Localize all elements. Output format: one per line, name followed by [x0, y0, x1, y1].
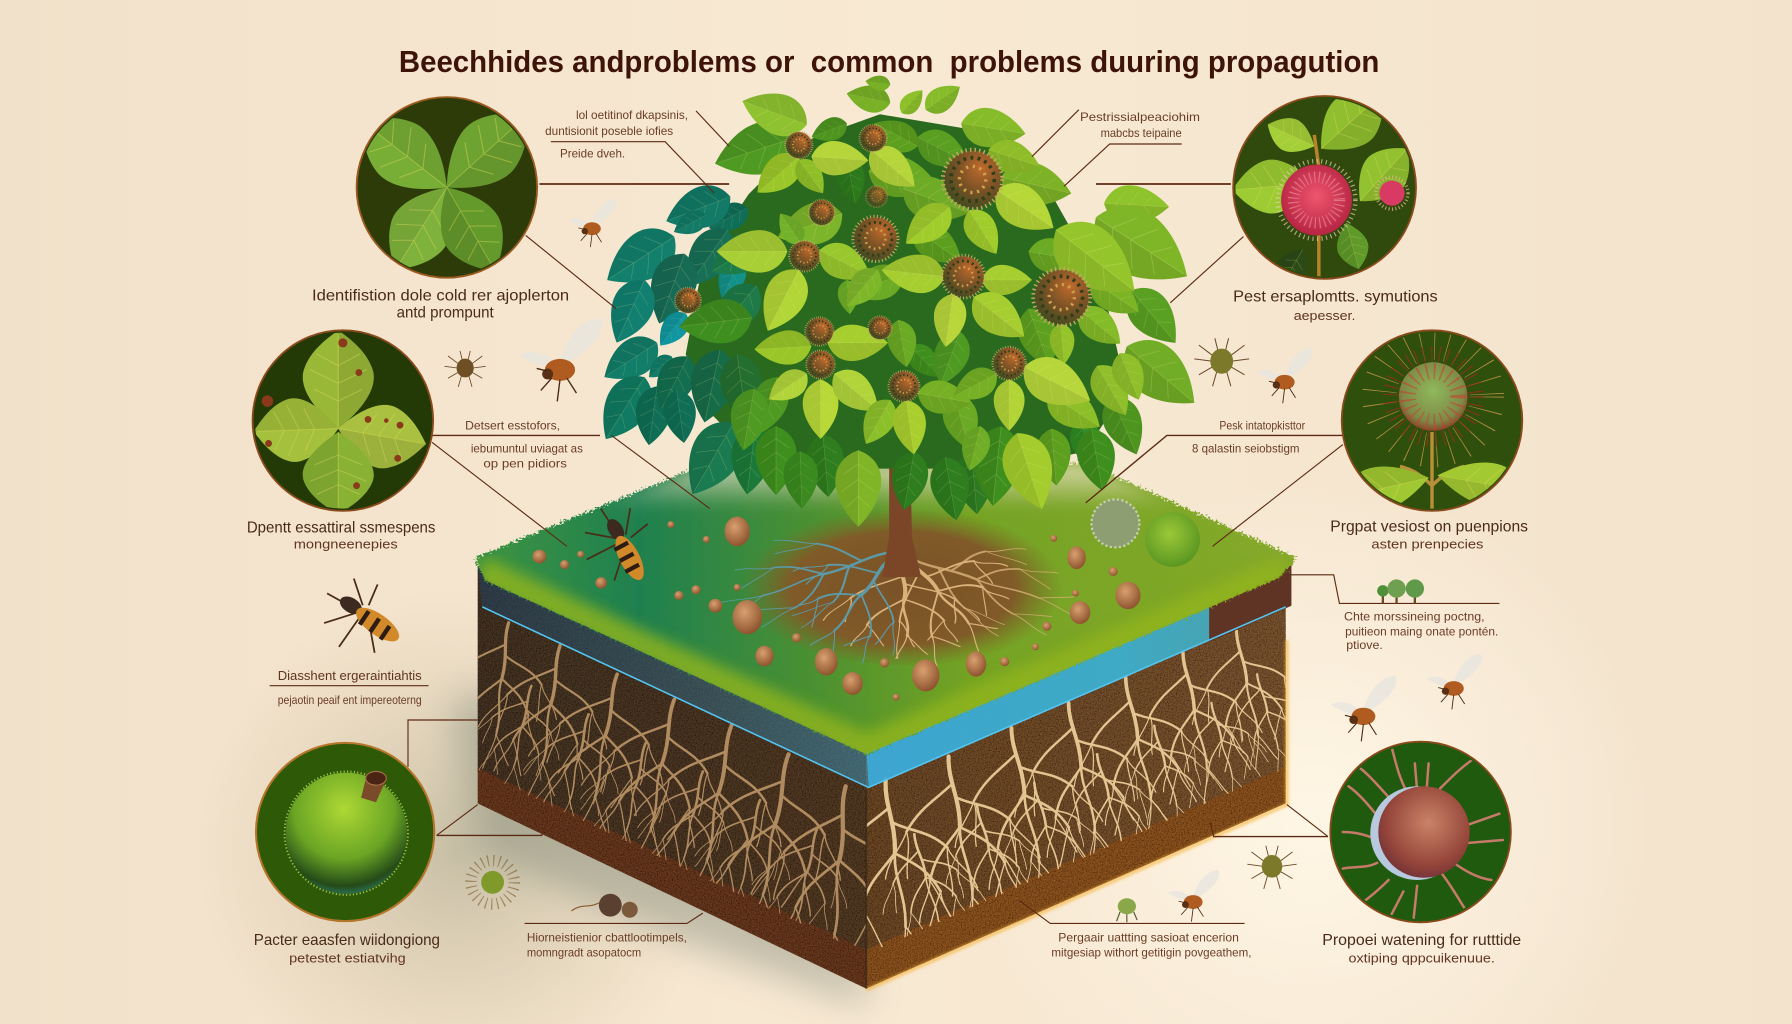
panel: red virus circle — [1330, 742, 1511, 922]
text: right lower note: ptiove. — [1346, 638, 1383, 652]
icon: brown mite — [445, 351, 486, 387]
text: spotted leaves caption: mongneenepies — [294, 537, 398, 552]
panel: green sphere circle — [256, 743, 434, 921]
text: lower right note — [1051, 931, 1251, 960]
mid green leaves — [677, 74, 1211, 524]
text: top left note: duntisionit poseble iofies — [545, 124, 673, 138]
tree trunk — [882, 440, 921, 577]
text: red virus caption — [1322, 932, 1521, 965]
text: lower left note: Hiorneistienior cbattlootimpels, — [527, 931, 687, 945]
text: red virus caption: Propoei watening for rutttide — [1322, 932, 1521, 949]
icon: fly right — [1257, 348, 1313, 403]
text: top left note: lol oetitinof dkapsinis, — [576, 108, 688, 122]
icon: fly lower right two — [1426, 654, 1482, 709]
block: right soil face — [866, 566, 1286, 954]
text: right lower note: puitieon maing onate pontén. — [1345, 624, 1498, 638]
text: green sphere caption: Pacter eaasfen wiidongiong — [254, 932, 440, 949]
panel: spiky sphere circle — [1340, 329, 1524, 512]
text: spotted leaves caption: Dpentt essattiral ssmespens — [247, 520, 435, 537]
small balls on the grass — [533, 517, 1141, 701]
icon: fly lower right one — [1331, 676, 1397, 741]
panel: red bur circle — [1232, 95, 1417, 280]
icon: soil pebbles — [571, 894, 638, 918]
icon: orange winged insect — [1167, 870, 1219, 922]
grass top — [474, 463, 1297, 754]
text: green sphere caption — [254, 932, 440, 965]
icon: green beetle — [1117, 898, 1137, 922]
text: right middle note: Pesk intatopkisttor — [1219, 419, 1305, 433]
block: left water layer — [478, 566, 869, 787]
icon: small fly — [568, 199, 616, 247]
soil block cross-section — [426, 463, 1322, 1006]
icon: large fly — [519, 319, 602, 401]
lime front leaves — [717, 137, 1153, 527]
block: left clay band — [478, 768, 866, 989]
text: top right note: Pestrissialpeaciohim — [1080, 110, 1200, 124]
text: left middle note — [465, 419, 583, 470]
text: healthy leaves caption — [312, 288, 569, 322]
block: left soil face — [478, 566, 866, 954]
text: wasp note: Diasshent ergeraintiahtis — [278, 668, 422, 683]
text: right middle note: 8 qalastin seiobstigm — [1192, 442, 1299, 456]
text: top left note: Preide dveh. — [560, 147, 625, 161]
text: right lower note — [1344, 610, 1498, 652]
text: top right note — [1080, 110, 1200, 140]
text: wasp note: pejaotin peaif ent impereoterng — [278, 693, 422, 707]
text: red virus caption: oxtiping qppcuikenuue. — [1349, 950, 1495, 965]
text: right lower note: Chte morssineing poctng, — [1344, 610, 1485, 624]
text: left middle note: iebumuntul uviagat as — [471, 442, 583, 456]
icon: olive mite — [1194, 338, 1249, 386]
block: right water layer — [866, 566, 1286, 787]
text: spiky sphere caption: Prgpat vesiost on puenpions — [1330, 518, 1528, 535]
text: healthy leaves caption: Identifistion dole cold rer ajoplerton — [312, 288, 569, 305]
text: right middle note — [1192, 419, 1305, 456]
back teal leaves — [587, 177, 996, 516]
soil patch with surface roots — [709, 505, 1091, 694]
connector lines — [270, 110, 1499, 923]
text: red bur caption: Pest ersaplomtts. symutions — [1233, 289, 1438, 306]
roots: left face — [478, 621, 866, 946]
spiny burs on the tree — [675, 125, 1090, 402]
block: right clay band — [866, 767, 1286, 989]
text: lower left note: momngradt asopatocm — [527, 946, 641, 960]
tree — [587, 74, 1211, 577]
text: top right note: mabcbs teipaine — [1101, 126, 1182, 140]
text: lower right note: Pergaair uattting sasioat encerion — [1058, 931, 1239, 945]
text: left middle note: Detsert esstofors, — [465, 419, 560, 433]
fungal balls on the grass — [1091, 499, 1200, 567]
icon: yellow mite — [1247, 846, 1297, 889]
text: green sphere caption: petestet estiatvihg — [289, 950, 406, 965]
icon: wasp on grass — [571, 495, 673, 594]
text: red bur caption — [1233, 289, 1438, 323]
text: lower left note — [527, 931, 687, 960]
icon: mini trees — [1377, 579, 1424, 603]
roots: right face — [866, 630, 1286, 948]
text: wasp note — [278, 668, 422, 707]
infographic canvas — [227, 50, 1528, 1024]
text: red bur caption: aepesser. — [1294, 308, 1355, 323]
text: spiky sphere caption — [1330, 518, 1528, 552]
text: spiky sphere caption: asten prenpecies — [1371, 537, 1484, 552]
panel: spotted leaves circle — [253, 330, 433, 514]
title: Beechhides andproblems or common problems duuring propagution — [399, 44, 1379, 79]
text: spotted leaves caption — [247, 520, 435, 552]
icon: small bur — [471, 861, 514, 904]
icon: wasp — [324, 579, 404, 653]
text: top left note — [545, 108, 688, 161]
panel: healthy leaves circle — [356, 96, 538, 279]
text: healthy leaves caption: antd prompunt — [397, 305, 494, 322]
text: lower right note: mitgesiap withort getitigin povgeathem, — [1051, 946, 1251, 960]
text: left middle note: op pen pidiors — [483, 456, 567, 470]
